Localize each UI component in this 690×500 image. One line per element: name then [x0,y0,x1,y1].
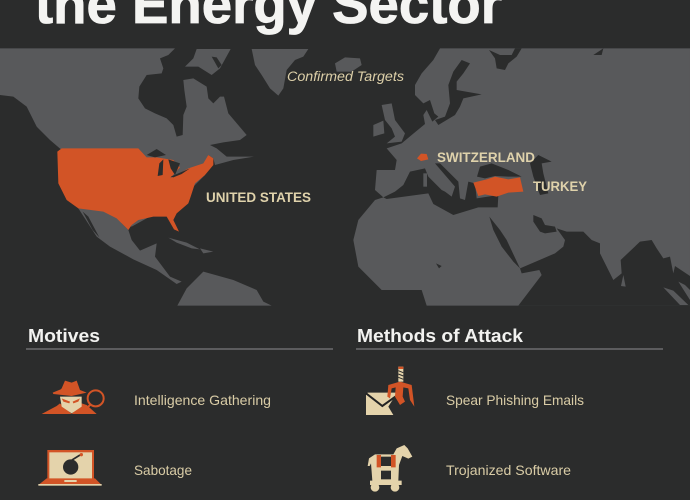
icon: trojan horse [368,445,412,492]
world map panel [0,48,690,306]
label: Switzerland: SWITZERLAND [437,150,535,165]
label: Turkey: TURKEY [533,179,587,194]
icon: spy with magnifier [42,381,104,414]
map: Great Lakes [147,149,190,177]
panel: methods of attack [356,326,663,492]
map: Americas landmass [0,48,308,306]
text: sabotage: Sabotage [134,462,192,478]
text: intelligence gathering: Intelligence Gathering [134,392,271,408]
text: trojanized software: Trojanized Software [446,462,571,478]
label: United States: UNITED STATES [206,190,311,205]
icon: laptop with bomb [38,450,102,486]
heading: methods of attack: Methods of Attack [357,326,524,346]
panel: motives [26,326,333,486]
map: Turkey highlighted [473,177,523,197]
map: Eurasia and Africa landmass [335,48,690,306]
map: Switzerland highlighted [417,154,428,161]
map: United States highlighted [57,148,213,232]
caption: confirmed targets: Confirmed Targets [287,69,404,84]
heading: motives: Motives [28,326,100,346]
icon: envelope with spear [366,367,414,415]
map: seas and gulfs [383,48,690,306]
text: spear phishing emails: Spear Phishing Emails [446,392,584,408]
